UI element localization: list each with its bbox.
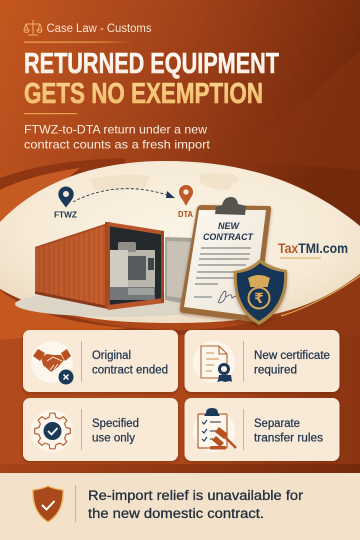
tag text: Case Law - Customs [46,23,152,35]
icon: customs shield [234,259,287,325]
card: separate transfer rules [184,398,340,461]
callout text: Re-import relief is unavailable for [88,488,304,503]
icon: customs shield: ₹ [254,290,264,306]
icon: gear with check [35,413,70,449]
machine [108,242,155,300]
container interior [108,225,163,306]
icon: shield with check [33,486,63,522]
card text: required [254,364,297,376]
title [24,48,279,110]
subtitle [24,122,211,152]
FTWZ label: FTWZ [54,210,77,220]
new contract text: NEW [218,221,240,232]
card: original contract ended [23,330,178,392]
title: RETURNED EQUIPMENT [24,48,279,80]
card text [254,418,323,444]
card text [254,350,330,376]
card text: Specified [92,418,139,430]
callout text [88,488,304,521]
header tag: case law [24,20,152,35]
new contract text [203,221,254,243]
icon: FTWZ pin [54,186,77,220]
card text: contract ended [92,364,168,376]
subtitle: contract counts as a fresh import [24,138,211,152]
subtitle: FTWZ-to-DTA return under a new [24,122,207,136]
card text [92,350,168,376]
icon: certificate [201,346,232,382]
card text: transfer rules [254,432,323,444]
header background [0,0,360,240]
clipboard clip [215,197,246,215]
card: specified use only [23,398,178,461]
TaxTMI logo: TaxTMI.com [278,241,348,256]
open door [165,237,196,306]
container frame [105,222,110,309]
container side [35,223,108,308]
hero panel [0,158,360,340]
callout text: the new domestic contract. [88,506,264,521]
new contract text: CONTRACT [203,232,254,243]
bottom strip [0,464,360,474]
card: new certificate required [184,330,340,392]
arrow: FTWZ to DTA [73,189,175,202]
card text: Separate [254,418,300,430]
floor [15,291,225,317]
container [35,222,196,310]
DTA label: DTA [178,210,193,219]
bottom callout [0,473,360,540]
icon: checklist and gavel [198,408,236,450]
title: GETS NO EXEMPTION [24,78,263,110]
signature [194,291,240,303]
card text: New certificate [254,350,330,362]
card text: use only [92,432,135,444]
card text: Original [92,350,131,362]
icon: DTA pin [178,185,193,219]
icon: handshake with cross [33,349,74,384]
icon: scales of justice [24,20,42,35]
card text [92,418,139,444]
clipboard [180,197,271,322]
